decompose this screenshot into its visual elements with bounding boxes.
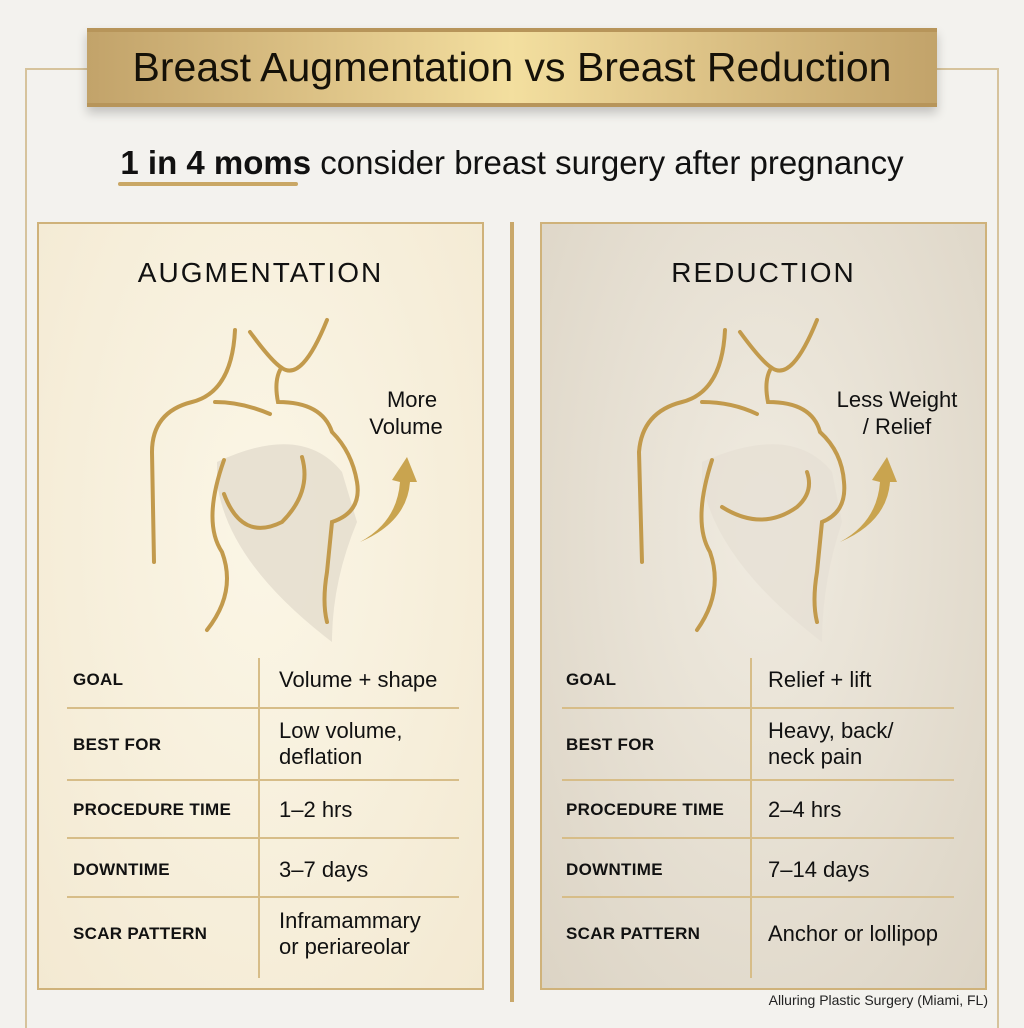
table: reduction [562,658,954,978]
heading: reduction: REDUCTION [671,257,856,288]
table: augmentation: Inframammary [279,908,421,933]
table: reduction: PROCEDURE TIME [566,800,724,819]
table: augmentation: SCAR PATTERN [73,924,207,943]
panel: reduction [540,222,987,990]
table: augmentation: Volume + shape [279,667,437,692]
table: augmentation: PROCEDURE TIME [73,800,231,819]
subtitle underline [118,182,298,186]
table: reduction: neck pain [768,744,862,769]
illustration: reduction [637,318,958,632]
table: reduction: Heavy, back/ [768,718,894,743]
table: augmentation: 3–7 days [279,857,368,882]
panel: augmentation [37,222,484,990]
table: augmentation: BEST FOR [73,735,161,754]
table: reduction: DOWNTIME [566,860,663,879]
table: reduction: Anchor or lollipop [768,921,938,946]
heading: augmentation: AUGMENTATION [138,257,383,288]
footer credit: Alluring Plastic Surgery (Miami, FL) [769,992,988,1008]
table: reduction: 2–4 hrs [768,797,841,822]
table: augmentation: DOWNTIME [73,860,170,879]
table: augmentation: deflation [279,744,362,769]
table: reduction: BEST FOR [566,735,654,754]
center divider [510,222,514,1002]
table: reduction: GOAL [566,670,616,689]
table: augmentation: or periareolar [279,934,410,959]
illustration: augmentation: More [387,387,437,412]
table: augmentation: 1–2 hrs [279,797,352,822]
title banner: Breast Augmentation vs Breast Reduction [133,44,891,90]
illustration: augmentation [150,318,443,642]
illustration: augmentation: Volume [369,414,443,439]
table: reduction: 7–14 days [768,857,870,882]
illustration: reduction: Less Weight [837,387,957,412]
illustration: reduction: / Relief [863,414,932,439]
table: augmentation: GOAL [73,670,123,689]
table: reduction: Relief + lift [768,667,871,692]
subtitle: 1 in 4 moms consider breast surgery after pregnancy [120,144,904,181]
table: reduction: SCAR PATTERN [566,924,700,943]
title banner [87,28,937,107]
table: augmentation [67,658,459,978]
table: augmentation: Low volume, [279,718,403,743]
